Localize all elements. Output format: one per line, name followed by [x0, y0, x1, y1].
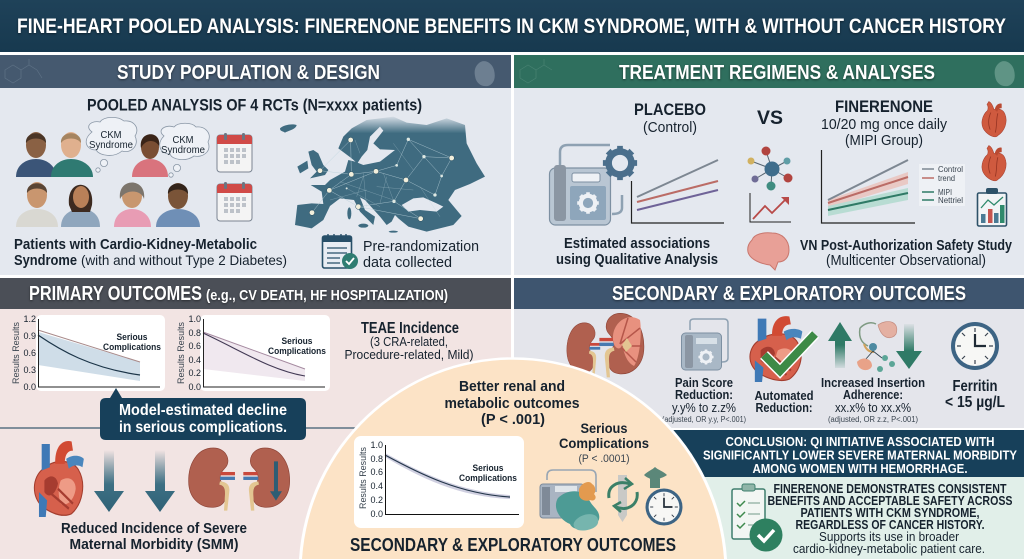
text: better renal outcomes: [444, 378, 580, 428]
text: TEAE incidence: Procedure-related, Mild): [344, 347, 474, 362]
text: takeaway statement: Supports its use in broader: [819, 530, 959, 544]
text: reduced incidence: Reduced Incidence of Severe: [61, 520, 247, 537]
chart: serious complications left: 1.2: [23, 314, 36, 324]
text: pre-randomization: data collected: [363, 254, 452, 271]
chart legend: MIPI: [938, 188, 952, 197]
panel: secondary and exploratory outcomes: [514, 278, 1024, 428]
icon: brain: [748, 233, 789, 270]
chart: serious complications centre: Serious: [472, 463, 504, 473]
text: reduced incidence: Maternal Morbidity (SMM): [70, 536, 239, 553]
text: takeaway statement: [768, 482, 1012, 556]
chart: serious complications left: 0.9: [23, 331, 36, 341]
finerenone label: FINERENONE: [835, 97, 933, 116]
text: TEAE incidence: [344, 320, 474, 362]
icon: patient group: [16, 132, 200, 227]
chart: serious complications centre: Results Results: [358, 447, 369, 509]
text: patients description: Syndrome: [14, 252, 77, 269]
text: ferritin: [945, 378, 1005, 411]
text: insertion adherence: Increased Insertion: [821, 375, 925, 390]
icon: kidney pair with cross-section: [567, 313, 644, 377]
text: automated reduction: Reduction:: [756, 400, 812, 415]
callout: CKM syndrome thought one: [86, 117, 137, 172]
map: europe trial network: [280, 117, 485, 233]
chart: serious complications right: 0.8: [188, 328, 201, 338]
text: better renal outcomes: metabolic outcomes: [444, 395, 580, 412]
chart: serious complications right: 1.0: [188, 314, 201, 324]
section header: study population: STUDY POPULATION & DESIGN: [117, 62, 380, 84]
text: ferritin: < 15 µg/L: [945, 394, 1005, 411]
section header: study population: [0, 55, 511, 88]
icon: clock: [951, 322, 999, 370]
callout: CKM syndrome thought one: Syndrome: [89, 139, 133, 151]
icon: anatomical heart: [34, 441, 84, 517]
icon: data document: [322, 234, 358, 269]
text: pain score: [662, 375, 746, 424]
text: insertion adherence: Adherence:: [843, 387, 903, 402]
panel: study population and design: [0, 55, 511, 275]
vs label: VS: [757, 107, 783, 129]
icon: recycle arrows: [609, 475, 637, 522]
text: better renal outcomes: Better renal and: [459, 378, 565, 395]
text: TEAE incidence: (3 CRA-related,: [370, 334, 448, 349]
subheading: pooled analysis: POOLED ANALYSIS OF 4 RCTs (N=xxxx patients): [87, 96, 422, 114]
text: pain score: (adjusted, OR y.y, P<.001): [662, 415, 746, 424]
text: reduced incidence: [61, 520, 247, 553]
callout: model-estimated decline: [100, 388, 306, 440]
divider: [0, 427, 360, 429]
chart legend: Nettriel: [938, 196, 963, 205]
callout: CKM syndrome thought two: CKM: [172, 134, 194, 146]
chart: serious complications right: Serious: [282, 336, 312, 346]
text: takeaway statement: cardio-kidney-metabolic patient care.: [793, 542, 985, 556]
conclusion banner: CONCLUSION: QI INITIATIVE ASSOCIATED WITH: [726, 434, 994, 449]
chart: serious complications centre: Complications: [459, 473, 517, 483]
text: serious complications p value: [559, 420, 649, 465]
panel: key takeaway: [600, 477, 1024, 559]
finerenone label: (MIPI Group): [845, 132, 923, 149]
chart: serious complications left: 0.3: [23, 365, 36, 375]
icon: molecule network: [748, 146, 792, 190]
callout: model-estimated decline: in serious complications.: [119, 419, 287, 436]
panel: primary outcomes: [0, 278, 511, 559]
text: estimated associations: Estimated associations: [564, 236, 710, 252]
chart: serious complications right: 0.2: [188, 368, 201, 378]
chart: serious complications centre: 0.0: [370, 509, 383, 519]
conclusion banner: [600, 430, 1024, 477]
text: pre-randomization: Pre-randomization: [363, 238, 479, 255]
chart: serious complications left: [11, 314, 165, 392]
text: automated reduction: [754, 388, 814, 415]
chart: serious complications right: Results Results: [176, 322, 187, 384]
text: insertion adherence: (adjusted, OR z.z, P<.001): [828, 415, 918, 424]
chart: serious complications left: Serious: [116, 332, 148, 342]
icon: device with organ blobs: [540, 470, 599, 531]
arrow: up: [828, 322, 852, 368]
chart: serious complications centre: 0.4: [370, 481, 383, 491]
panel: treatment regimens and analyses: [514, 55, 1024, 275]
arrow: down: [896, 324, 922, 369]
icon: small rising chart: [750, 193, 791, 222]
chart: serious complications right: 0.6: [188, 341, 201, 351]
section header: secondary outcomes: [514, 278, 1024, 309]
text: estimated associations: using Qualitative Analysis: [556, 252, 718, 268]
finerenone label: 10/20 mg once daily: [821, 116, 947, 133]
text: takeaway statement: REGARDLESS OF CANCER HISTORY.: [796, 518, 984, 532]
text: pain score: Pain Score: [675, 375, 733, 390]
chart: serious complications centre: 0.8: [370, 454, 383, 464]
chart: serious complications left: Complications: [103, 342, 161, 352]
text: patients description: Patients with Cardio-Kidney-Metabolic: [14, 236, 257, 253]
text: estimated associations: [556, 236, 718, 268]
placebo label: PLACEBO: [634, 100, 706, 119]
section header: treatment: TREATMENT REGIMENS & ANALYSES: [619, 62, 935, 84]
chart: serious complications centre: 0.2: [370, 495, 383, 505]
text: insertion adherence: [821, 375, 925, 424]
icon: clock with arrow: [644, 467, 682, 525]
text: serious complications p value: Complications: [559, 435, 649, 451]
chart: serious complications left: Results Results: [11, 322, 22, 384]
icon: infusion device with gears: [550, 145, 637, 225]
icon: organ cluster: [857, 322, 897, 372]
text: serious complications p value: Serious: [580, 420, 628, 436]
text: automated reduction: Automated: [754, 388, 814, 403]
chart legend: trend: [938, 174, 955, 183]
section header: primary outcomes: [0, 278, 511, 309]
chart: placebo trend lines: [632, 160, 724, 223]
chart: finerenone trend lines: [822, 150, 915, 223]
icon: monitor device: [682, 319, 728, 370]
text: secondary outcomes footer: SECONDARY & EXPLORATORY OUTCOMES: [350, 535, 676, 555]
icon: checklist clipboard: [732, 484, 782, 552]
text: ferritin: Ferritin: [952, 378, 998, 395]
chart: serious complications left: 0.0: [23, 382, 36, 392]
chart: serious complications right: Complications: [268, 346, 326, 356]
text: safety study: (Multicenter Observational): [826, 253, 986, 269]
chart: serious complications right: 0.0: [188, 382, 201, 392]
chart legend: [919, 164, 965, 206]
section header: primary outcomes: (e.g., CV DEATH, HF HOSPITALIZATION): [206, 287, 448, 304]
text: takeaway statement: PATIENTS WITH CKM SYNDROME,: [800, 506, 980, 520]
section header: primary outcomes: PRIMARY OUTCOMES: [29, 283, 202, 305]
chart: serious complications right: [176, 314, 330, 392]
finerenone label: [821, 97, 947, 149]
icon: heart with check: [750, 316, 815, 382]
callout: CKM syndrome thought two: [160, 123, 209, 177]
text: insertion adherence: xx.x% to xx.x%: [835, 400, 911, 415]
title banner: [0, 0, 1024, 52]
panel: central semicircle outcomes: [299, 357, 727, 559]
callout: model-estimated decline: Model-estimated decline: [119, 402, 287, 419]
conclusion banner: AMONG WOMEN WITH HEMORRHAGE.: [752, 461, 968, 476]
text: TEAE incidence: TEAE Incidence: [361, 320, 459, 337]
chart: serious complications centre: 1.0: [370, 440, 383, 450]
callout: CKM syndrome thought one: CKM: [100, 129, 122, 141]
arrow: down one: [94, 450, 124, 512]
chart: serious complications centre: 0.6: [370, 467, 383, 477]
text: pre-randomization: [363, 238, 479, 271]
chart: serious complications centre: [354, 436, 524, 528]
text: patients description: [14, 236, 287, 269]
text: patients description: (with and without Type 2 Diabetes): [81, 252, 287, 268]
icon: kidneys with arrow: [189, 448, 290, 511]
icon: two hearts: [982, 101, 1006, 181]
icon: calendars: [217, 133, 252, 221]
text: better renal outcomes: (P < .001): [481, 411, 545, 428]
chart: serious complications left: 0.6: [23, 348, 36, 358]
section header: treatment: [514, 55, 1024, 88]
callout: CKM syndrome thought two: Syndrome: [161, 144, 205, 156]
chart legend: Control: [938, 165, 963, 174]
placebo label: [634, 100, 706, 136]
text: pain score: y.y% to z.z%: [672, 400, 736, 415]
text: serious complications p value: (P < .0001): [578, 453, 630, 465]
text: safety study: [800, 238, 1012, 269]
section header: secondary outcomes: SECONDARY & EXPLORATORY OUTCOMES: [612, 283, 966, 305]
arrow: down two: [145, 450, 175, 512]
icon: clipboard chart: [978, 188, 1006, 226]
placebo label: (Control): [643, 119, 697, 136]
text: pain score: Reduction:: [675, 387, 733, 402]
chart: serious complications right: 0.4: [188, 355, 201, 365]
